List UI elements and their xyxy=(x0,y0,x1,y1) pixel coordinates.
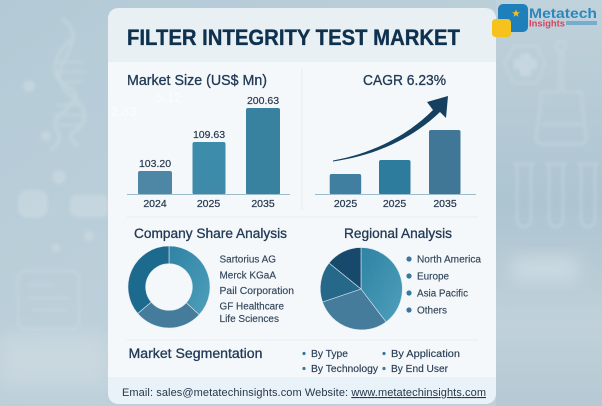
panel: regional analysis xyxy=(320,226,481,330)
heading: market size: Market Size (US$ Mn) xyxy=(127,73,267,89)
infographic card xyxy=(108,8,496,404)
CAGR year labels xyxy=(334,198,457,210)
segment list xyxy=(302,349,460,375)
heading: company share: Company Share Analysis xyxy=(134,226,287,241)
background icon: DNA helix xyxy=(50,18,86,150)
title: FILTER INTEGRITY TEST MARKET xyxy=(127,25,460,50)
pie chart xyxy=(320,248,402,330)
contact text: Email: sales@metatechinsights.com Website: www.metatechinsights.com xyxy=(122,387,486,399)
heading: regional: Regional Analysis xyxy=(344,226,452,241)
panel: CAGR chart xyxy=(315,73,476,210)
donut legend: Merck KGaA xyxy=(220,270,276,282)
background icon: clipboard xyxy=(18,271,79,329)
pie legend: Others xyxy=(417,306,447,316)
faint floating values: 5.12 xyxy=(156,90,181,105)
background icon: flask xyxy=(536,41,586,144)
background icon: molecules xyxy=(18,80,108,252)
year labels: 2035 xyxy=(251,198,275,210)
donut chart xyxy=(128,246,210,328)
logo: Metatech Insights: Insights xyxy=(529,18,565,28)
pie legend: Asia Pacific xyxy=(417,288,468,300)
logo: Metatech Insights xyxy=(492,4,597,37)
segment list: By Application xyxy=(391,349,460,360)
value labels: 200.63 xyxy=(247,95,279,107)
segment list: By End User xyxy=(391,364,449,375)
pie legend xyxy=(406,254,481,316)
donut legend: Sartorius AG xyxy=(220,254,276,266)
year labels xyxy=(143,198,275,210)
value labels xyxy=(139,95,279,170)
value labels: 103.20 xyxy=(139,158,171,170)
heading: CAGR: CAGR 6.23% xyxy=(363,73,446,89)
CAGR bars xyxy=(330,130,460,194)
year labels: 2025 xyxy=(197,198,220,210)
pie legend: North America xyxy=(417,254,481,266)
logo wordmark: Metatech xyxy=(529,6,597,21)
bars xyxy=(138,108,280,194)
donut legend: Life Sciences xyxy=(220,314,279,325)
donut legend: Pail Corporation xyxy=(220,286,294,297)
CAGR year labels: 2025 xyxy=(334,198,357,210)
background icon: test tubes xyxy=(513,164,599,227)
segment list: By Technology xyxy=(311,364,378,375)
heading: segmentation: Market Segmentation xyxy=(128,346,262,361)
title band xyxy=(108,8,496,62)
arrow: growth xyxy=(333,96,448,162)
logo icon xyxy=(492,4,528,37)
donut legend xyxy=(220,254,294,325)
pie legend: Europe xyxy=(417,272,449,282)
value labels: 109.63 xyxy=(193,129,225,141)
background icon: hexagon cross xyxy=(504,46,545,83)
donut legend: GF Healthcare xyxy=(220,302,284,312)
panel: market size bar chart xyxy=(127,73,290,210)
CAGR year labels: 2025 xyxy=(383,198,406,210)
footer contact band xyxy=(108,377,496,404)
year labels: 2024 xyxy=(143,198,167,210)
panel: company share analysis xyxy=(128,226,294,328)
faint floating values xyxy=(111,90,181,119)
segment list: By Type xyxy=(311,349,348,360)
faint floating values: 2.83 xyxy=(111,104,136,119)
CAGR year labels: 2035 xyxy=(433,198,457,210)
panel: market segmentation xyxy=(128,346,460,375)
